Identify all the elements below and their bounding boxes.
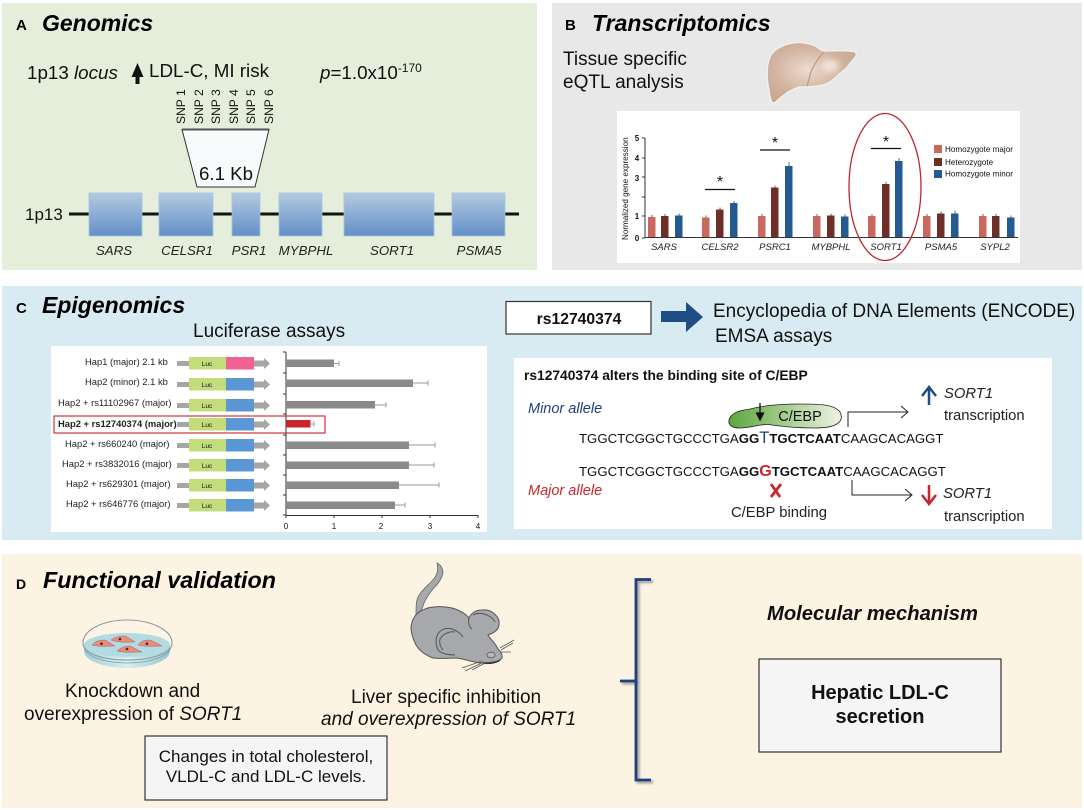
construct labels: Hap2 + rs646776 (major) [66,498,170,509]
significance marks: * [772,135,778,152]
SNP labels: SNP 3 [209,89,223,124]
construct labels [58,356,177,509]
panel: epigenomics [2,286,1082,540]
transcription text: transcription [944,509,1025,525]
red cross [771,484,781,497]
gene track [69,193,519,236]
gene names: PSMA5 [456,243,502,258]
binding site panel [514,358,1052,529]
p value: -170 [398,61,422,75]
construct labels: Hap2 (minor) 2.1 kb [85,376,168,387]
construct labels: Hap1 (major) 2.1 kb [85,356,168,367]
significance marks [705,134,901,191]
icon: liver [767,43,856,103]
zoom trapezoid 6.1 Kb [182,130,269,187]
x axis gene names: SYPL2 [980,242,1011,253]
gene names [96,243,502,258]
C/EBP protein: C/EBP [778,409,822,425]
activation arrow [848,406,908,427]
gene names: MYBPHL [279,243,333,258]
molecular mechanism heading: Molecular mechanism [767,603,978,625]
panel letter A: A [16,17,27,34]
axis numbers [284,522,481,531]
mechanism box: secretion [836,706,924,728]
x axis gene names: MYBPHL [811,242,851,253]
construct labels: Hap2 + rs3832016 (major) [62,458,172,469]
bar chart: eQTL expression: 1 [635,212,640,221]
panel letter C: C [16,300,27,317]
luciferase chart [51,346,487,532]
x axis gene names: PSMA5 [925,242,958,253]
axis numbers: 0 [284,522,289,531]
panel: functional validation [2,554,1082,808]
SNP box: rs12740374 [537,311,622,328]
cholesterol box [145,736,387,800]
axis numbers: 4 [476,522,481,531]
SORT1 up text: SORT1 [944,386,993,402]
reduced arrow [852,480,912,501]
SNP box [506,302,651,334]
significance marks: * [883,134,889,151]
construct labels: Hap2 + rs629301 (major) [66,478,170,489]
major sequence: TGGCTCGGCTGCCCTGAGGGTGCTCAATCAAGCACAGGT [579,463,946,480]
risk text: LDL-C, MI risk [149,60,270,81]
bars [648,158,1014,237]
bar chart: eQTL expression: 0 [635,234,640,243]
knockdown text: Knockdown and [65,681,200,702]
bar chart: eQTL expression: 3 [635,174,640,183]
tissue text: Tissue specific [563,49,687,70]
significance marks: * [717,174,723,191]
p value: p=1.0x10 [320,62,398,83]
binding text: C/EBP binding [731,505,827,521]
x axis gene names: PSRC1 [759,242,791,253]
mechanism box: Hepatic LDL-C [811,682,949,704]
constructs [177,357,270,512]
constructs: Luc [202,422,213,429]
icon: blue up arrow [922,387,936,405]
transcription text: transcription [944,408,1025,424]
eQTL text: eQTL analysis [563,72,684,93]
gene names: CELSR1 [161,243,213,258]
axis numbers: 3 [428,522,433,531]
panel letter D: D [16,576,26,592]
heading: Genomics: Genomics [42,10,153,36]
heading: Epigenomics: Epigenomics [42,292,185,318]
heading: Transcriptomics: Transcriptomics [592,10,771,36]
gene names: PSR1 [232,243,266,258]
construct labels: Hap2 + rs11102967 (major) [58,397,172,408]
panel letter B: B [565,17,576,34]
icon: red down arrow [922,485,936,504]
luciferase heading: Luciferase assays [193,321,345,342]
bar chart: eQTL expression: 5 [635,134,640,143]
arrow [661,302,703,332]
constructs: Luc [202,361,213,368]
x axis gene names: SORT1 [870,242,902,253]
SNP labels: SNP 6 [262,89,276,124]
SNP labels: SNP 5 [244,89,258,124]
C/EBP protein [729,403,841,428]
gene names: SORT1 [370,243,414,258]
EMSA text: EMSA assays [715,326,832,347]
y axis label: Normalized gene expression [621,137,630,240]
constructs: Luc [202,443,213,450]
SNP labels: SNP 2 [192,89,206,124]
red highlight ellipse SORT1 [849,114,921,260]
axis numbers: 1 [332,522,337,531]
major allele label: Major allele [528,483,602,499]
legend: Heterozygote [945,158,994,167]
horizontal bars with error bars [283,352,478,518]
construct labels: Hap2 + rs12740374 (major) [58,418,177,429]
x axis gene names: CELSR2 [702,242,739,253]
legend: Homozygote major [945,145,1013,154]
cholesterol box: VLDL-C and LDL-C levels. [166,767,366,786]
icon: up arrow [132,63,144,84]
bar chart: eQTL expression: 4 [635,154,640,163]
SNP labels: SNP 1 [174,89,188,124]
SORT1 down text: SORT1 [943,486,992,502]
bracket [620,580,651,780]
legend [934,145,1013,178]
binding heading: rs12740374 alters the binding site of C/EBP [524,368,808,383]
axis numbers: 2 [379,522,384,531]
italic overexpression text: and overexpression of SORT1 [321,709,576,730]
red highlight box [54,416,325,433]
x axis gene names [651,242,1011,253]
heading: Functional validation: Functional validation [43,567,276,593]
overexpression text: overexpression of SORT1 [24,704,242,725]
locus text: 1p13 locus [27,62,118,83]
minor sequence: TGGCTCGGCTGCCCTGAGGTTGCTCAATCAAGCACAGGT [579,429,943,447]
x axis gene names: SARS [651,242,678,253]
constructs: Luc [202,382,213,389]
constructs: Luc [202,503,213,510]
ENCODE text: Encyclopedia of DNA Elements (ENCODE) [713,301,1075,322]
minor allele label: Minor allele [528,401,602,417]
panel: genomics [2,3,537,270]
SNP labels: SNP 4 [227,89,241,124]
panel: transcriptomics [552,3,1082,270]
icon: mouse [411,563,514,671]
construct labels: Hap2 + rs660240 (major) [65,438,169,449]
bar chart: eQTL expression [617,111,1020,263]
cholesterol box: Changes in total cholesterol, [159,747,373,766]
mechanism box [759,659,1001,752]
gene names: SARS [96,243,132,258]
zoom trapezoid 6.1 Kb: 6.1 Kb [199,163,253,184]
chromosome label: 1p13 [25,205,63,224]
constructs: Luc [202,483,213,490]
liver inhibition text: Liver specific inhibition [351,687,541,708]
constructs: Luc [202,463,213,470]
SNP labels [174,89,276,124]
icon: petri dish [83,620,172,668]
legend: Homozygote minor [945,170,1013,178]
constructs: Luc [202,403,213,410]
